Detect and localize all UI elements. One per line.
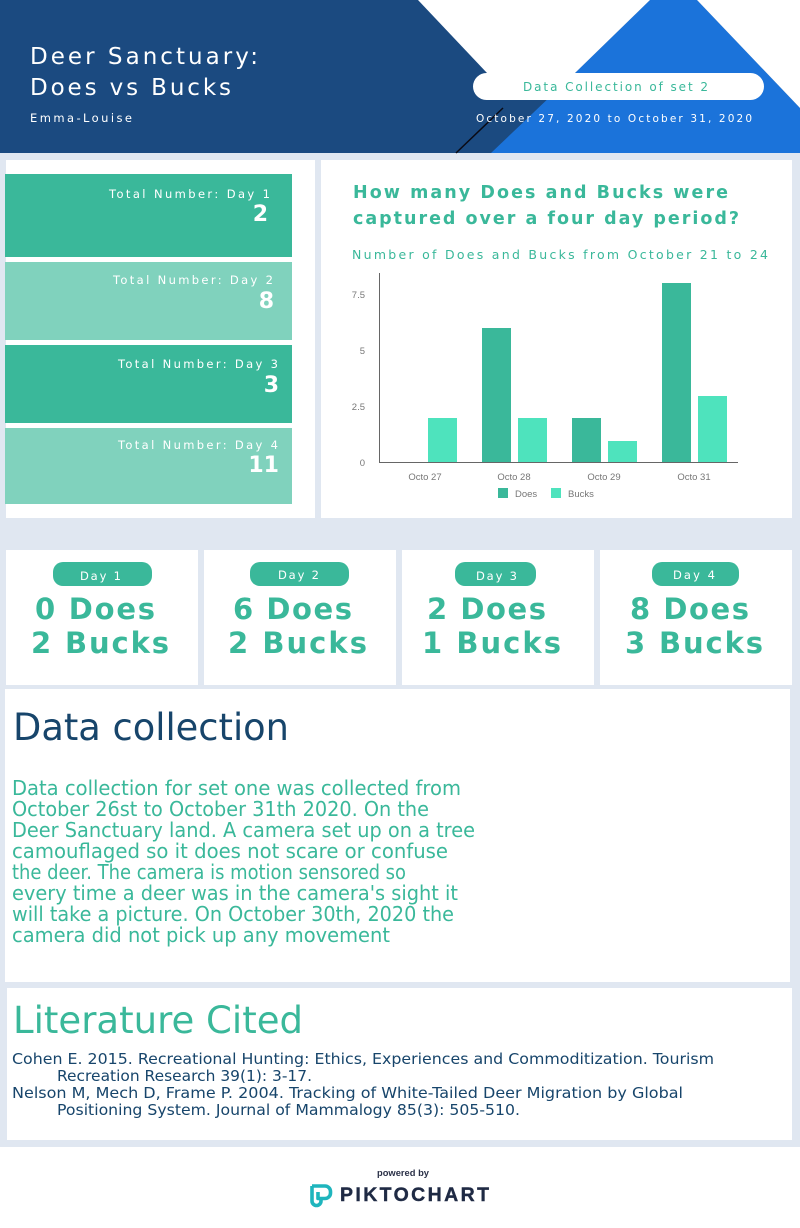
panel: data collection: [5, 689, 790, 982]
data collection heading: Data collection: [13, 706, 289, 749]
chart heading: [353, 183, 739, 229]
chart legend: Does: [515, 489, 537, 500]
logo wordmark: PIKTOCHART: [340, 1184, 489, 1206]
chart subtitle: Number of Does and Bucks from October 21 to 24: [352, 247, 768, 262]
total day 1: 2: [253, 202, 268, 227]
bar chart: 7.5: [352, 290, 365, 301]
panel: chart: [321, 160, 792, 518]
total day 2: [5, 262, 292, 340]
data collection text: will take a picture. On October 30th, 2020 the: [12, 902, 454, 926]
data collection text: Data collection for set one was collected from: [12, 776, 461, 800]
panel: literature cited: [7, 988, 792, 1140]
total day 4: Total Number: Day 4: [117, 438, 278, 452]
data collection text: the deer. The camera is motion sensored so: [12, 860, 406, 884]
panel: day 4: [600, 550, 792, 685]
bar chart: Octo 28: [497, 472, 531, 483]
total day 3: 3: [264, 373, 279, 398]
bar chart: Octo 31: [677, 472, 711, 483]
panel: day 2: 6 Does: [233, 592, 352, 626]
title: [30, 44, 258, 101]
total day 3: Total Number: Day 3: [117, 357, 278, 371]
bar chart: [352, 273, 738, 500]
panel: day 2: [204, 550, 396, 685]
chart heading: captured over a four day period?: [353, 209, 739, 229]
data collection text: every time a deer was in the camera's sight it: [12, 881, 458, 905]
panel: day 2: 2 Bucks: [228, 626, 367, 660]
panel: day 1: 0 Does: [35, 592, 155, 626]
data collection text: Deer Sanctuary land. A camera set up on a tree: [12, 818, 475, 842]
total day 2: 8: [259, 289, 274, 314]
total day 4: [5, 428, 292, 504]
bar chart: 2.5: [352, 402, 365, 413]
subtitle pill: Data Collection of set 2: [523, 80, 708, 94]
panel: day 3: Day 3: [476, 569, 517, 583]
total day 1: [5, 174, 292, 257]
references: Nelson M, Mech D, Frame P. 2004. Tracking of White-Tailed Deer Migration by Global: [12, 1084, 683, 1102]
panel: day 4: 8 Does: [630, 592, 749, 626]
panel: day 1: [6, 550, 198, 685]
panel: daily totals: [5, 160, 315, 518]
panel: day 3: 2 Does: [427, 592, 546, 626]
panel: day 1: Day 1: [80, 569, 121, 583]
total day 3: [5, 345, 292, 423]
title: Does vs Bucks: [30, 75, 231, 101]
data collection text: camouflaged so it does not scare or confuse: [12, 839, 448, 863]
panel: day 3: 1 Bucks: [422, 626, 561, 660]
chart legend: [498, 488, 594, 500]
subtitle pill: [473, 73, 764, 100]
icon: piktochart logo: [312, 1186, 330, 1206]
author: Emma-Louise: [30, 111, 132, 125]
powered by: powered by: [377, 1168, 429, 1178]
data collection text: October 26st to October 31th 2020. On the: [12, 797, 429, 821]
bar chart: 5: [360, 346, 365, 357]
total day 1: Total Number: Day 1: [108, 187, 270, 201]
data collection text: [12, 776, 475, 947]
literature heading: Literature Cited: [13, 999, 303, 1042]
total day 4: 11: [248, 453, 279, 478]
bar chart: Octo 29: [587, 472, 621, 483]
chart legend: Bucks: [568, 489, 594, 500]
panel: day 3: [402, 550, 594, 685]
panel: day 4: 3 Bucks: [625, 626, 763, 660]
bar chart: Octo 27: [408, 472, 442, 483]
footer: [0, 1147, 800, 1228]
panel: day 1: 2 Bucks: [31, 626, 169, 660]
data collection text: camera did not pick up any movement: [12, 923, 390, 947]
references: Recreation Research 39(1): 3-17.: [57, 1067, 312, 1085]
panel: day 4: Day 4: [673, 568, 715, 582]
panel: day 2: Day 2: [278, 568, 319, 582]
references: Cohen E. 2015. Recreational Hunting: Ethics, Experiences and Commoditization. Tourism: [12, 1050, 714, 1068]
references: [12, 1050, 714, 1119]
bar chart: 0: [360, 458, 365, 469]
header banner: [0, 0, 800, 153]
title: Deer Sanctuary:: [30, 44, 258, 70]
chart heading: How many Does and Bucks were: [353, 183, 728, 203]
total day 2: Total Number: Day 2: [112, 273, 273, 287]
date range: October 27, 2020 to October 31, 2020: [476, 113, 752, 125]
references: Positioning System. Journal of Mammalogy 85(3): 505-510.: [57, 1101, 520, 1119]
